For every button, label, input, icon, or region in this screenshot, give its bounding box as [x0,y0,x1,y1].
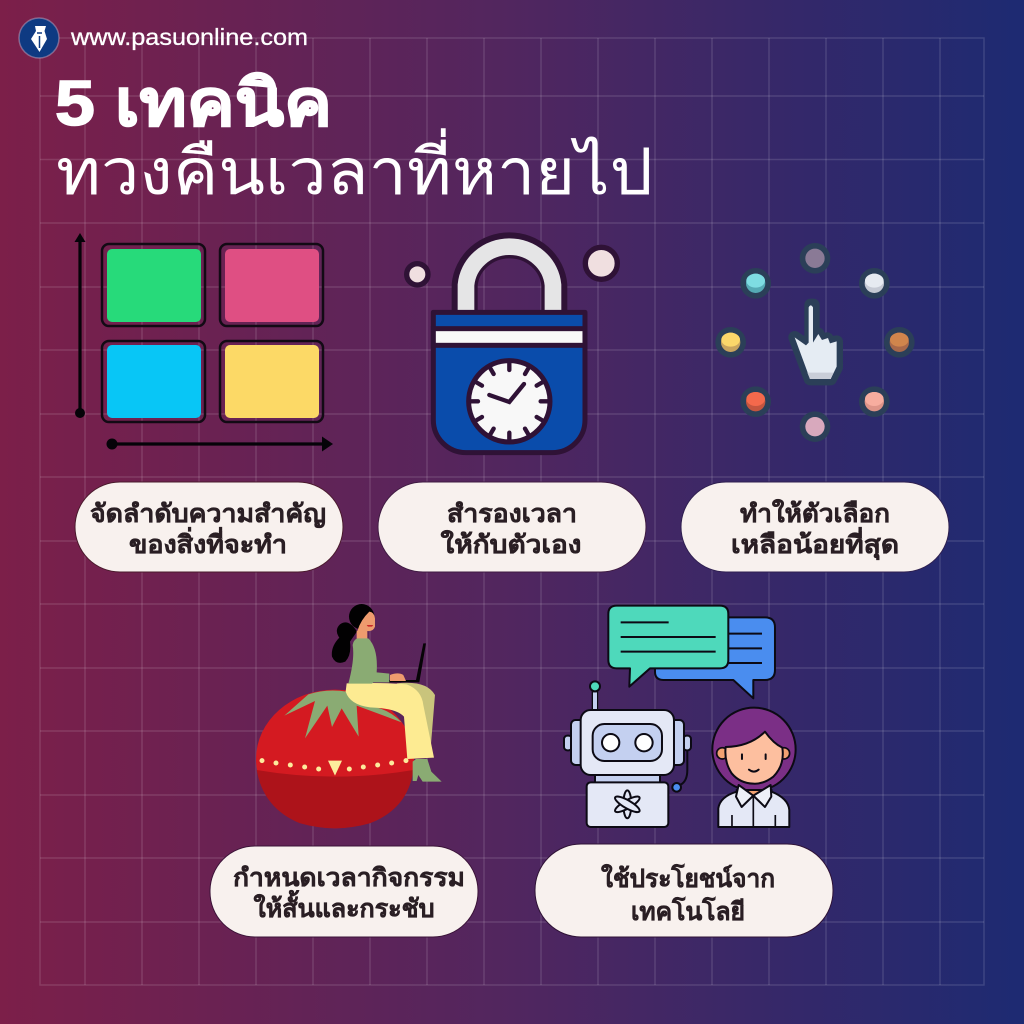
pill: fewer choices: ทำให้ตัวเลือก [740,498,890,528]
icon: robot and person chatting [564,606,796,827]
pill: prioritize: ของสิ่งที่จะทำ [129,527,287,559]
pill: reserve time: ให้กับตัวเอง [440,529,582,559]
pill: reserve time [378,482,646,572]
pill: prioritize [75,482,343,572]
pill: short activities: ให้สั้นและกระชับ [254,889,434,923]
pill: use technology [535,844,833,937]
title [55,67,653,208]
website url: www.pasuonline.com [70,24,308,50]
woman figure [332,604,442,782]
pill: prioritize: จัดลำดับความสำคัญ [90,500,326,528]
pill: use technology: เทคโนโลยี [631,896,745,926]
icon: pomodoro tomato with woman [256,604,442,828]
pill: use technology: ใช้ประโยชน์จาก [601,863,775,893]
title: ทวงคืนเวลาที่หายไป [56,128,653,208]
logo [19,18,59,58]
pill: short activities [210,846,478,937]
icon: priority matrix [74,233,333,452]
pill: fewer choices [681,482,949,572]
pill: reserve time: สำรองเวลา [447,500,577,528]
icon: padlock with clock [407,245,617,453]
pill: short activities: กำหนดเวลากิจกรรม [233,864,465,892]
title: 5 เทคนิค [55,67,332,139]
icon: choice dots with pointing hand [715,243,915,442]
pill: fewer choices: เหลือน้อยที่สุด [731,527,899,561]
